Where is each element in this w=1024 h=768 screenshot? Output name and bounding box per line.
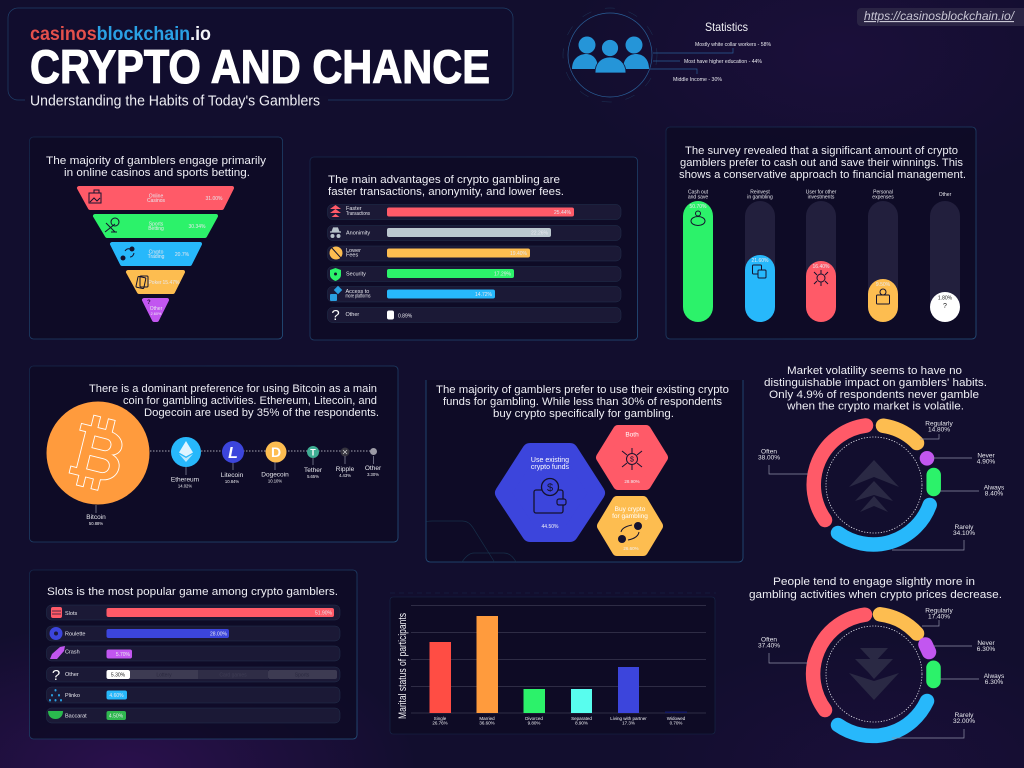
coin: ripple [336, 448, 355, 478]
bar: crash [46, 646, 340, 661]
axis labels: 17.3% [622, 720, 635, 726]
pill: used for other investments: User for other [806, 190, 837, 196]
funnel: crypto trading: 20.7% [175, 252, 190, 258]
funnel: other [144, 300, 167, 320]
axis labels: 9.80% [528, 720, 540, 726]
funnel: online casinos [79, 188, 232, 208]
pill: reinvest in gambling [745, 190, 775, 322]
icon: up arrows [849, 460, 899, 512]
winnings heading: The survey revealed that a significant amount of crypto [685, 145, 958, 157]
bar: baccarat [46, 708, 340, 723]
funnel: crypto trading: Crypto [149, 250, 164, 256]
y-axis title: Marital status of participants [397, 613, 409, 719]
winnings heading: shows a conservative approach to financial management. [679, 169, 966, 181]
coin: litecoin: 10.84% [225, 479, 239, 484]
panel: market volatility donut [758, 365, 1005, 550]
volatility labels: Rarely [955, 524, 974, 531]
price decrease labels: Rarely [955, 712, 974, 719]
price decrease heading [749, 576, 1002, 601]
main title: CRYPTO AND CHANCE [30, 40, 490, 93]
bar: plinko: 4.60% [109, 693, 124, 699]
axis labels: 8.90% [575, 720, 588, 726]
axis labels: Single [434, 716, 447, 721]
pill: cash out and save [683, 190, 713, 322]
volatility labels: 4.90% [977, 458, 995, 466]
panel: title [8, 8, 513, 110]
funding heading: The majority of gamblers prefer to use their existing crypto [436, 384, 729, 396]
bar: other: Other [346, 312, 359, 318]
pill: personal expenses: 9.50% [876, 282, 891, 288]
hexagon: use existing crypto funds: 44.50% [542, 524, 559, 530]
bar: other [328, 307, 621, 324]
bar: roulette [46, 626, 340, 641]
coin: dogecoin [261, 442, 289, 484]
funnel: online casinos: 31.00% [206, 196, 223, 202]
statistics list: Most have higher education - 44% [684, 59, 763, 65]
bar: access to more platforms: Access to [346, 289, 369, 295]
price decrease labels [758, 608, 1005, 725]
bar: faster transactions: Transactions [346, 211, 370, 217]
volatility labels: 14.80% [928, 426, 950, 434]
volatility labels: Never [977, 452, 996, 460]
hexagon: buy crypto for gambling: 26.60% [623, 546, 639, 551]
bar: other with sub-categories: Lottery [156, 672, 172, 678]
advantages heading: faster transactions, anonymity, and lower fees. [328, 186, 564, 198]
axis labels: Living with partner [610, 716, 647, 721]
funnel heading: in online casinos and sports betting. [64, 167, 250, 179]
volatility labels: Always [984, 484, 1005, 492]
price decrease labels: 6.30% [977, 646, 995, 653]
pill: personal expenses [868, 190, 898, 322]
statistics heading: Statistics [705, 20, 748, 34]
bar: faster transactions: Faster [346, 206, 362, 212]
bar: access to more platforms: more platforms [346, 294, 371, 300]
pill: used for other investments [806, 190, 837, 322]
bar: access to more platforms: 14.72% [475, 292, 493, 298]
bar: lower fees [328, 246, 621, 261]
coins heading: coin for gambling activities. Ethereum, Litecoin, and [123, 395, 377, 407]
subtitle: Understanding the Habits of Today's Gamblers [30, 92, 320, 110]
volatility heading [764, 365, 987, 412]
website url [857, 8, 1024, 26]
pill: used for other investments: 16.40% [813, 264, 830, 270]
bar: crash: 5.70% [116, 652, 131, 658]
icon: people in circle [563, 8, 657, 102]
coin: bitcoin [46, 402, 150, 526]
price decrease heading: People tend to engage slightly more in [773, 576, 975, 588]
pill: personal expenses: expenses [872, 194, 894, 200]
price decrease labels: 37.40% [758, 642, 780, 650]
bar: crash: Crash [65, 650, 80, 656]
funding heading: buy crypto specifically for gambling. [493, 408, 674, 420]
brand name: casinosblockchain.io [30, 24, 211, 45]
funnel: crypto trading [112, 244, 200, 264]
price decrease labels: Always [984, 673, 1005, 680]
bar: other: 0.89% [398, 314, 413, 320]
coin: ethereum: 14.02% [178, 484, 192, 488]
coin: other [365, 448, 382, 477]
slots heading: Slots is the most popular game among crypto gamblers. [47, 586, 338, 598]
pill: other: Other [939, 192, 952, 198]
panel: statistics [563, 8, 772, 102]
bar: roulette: Roulette [65, 632, 86, 638]
coins heading: Dogecoin are used by 35% of the respondents. [144, 407, 379, 419]
bar: other with sub-categories: Sports [295, 672, 310, 678]
coin: ripple: Ripple [336, 466, 355, 473]
coin: dogecoin: D [271, 444, 281, 460]
price decrease labels: Never [977, 640, 996, 647]
axis labels: 0.70% [670, 720, 682, 726]
funnel: poker: Poker [148, 280, 162, 286]
volatility labels: Often [761, 448, 777, 456]
statistics list [673, 42, 772, 83]
coins heading: There is a dominant preference for using Bitcoin as a main [89, 383, 377, 395]
hexagon: buy crypto for gambling: for gambling [612, 513, 648, 520]
funnel: sports betting [95, 216, 216, 236]
funnel: other: Other [150, 306, 163, 312]
hexagon: use existing crypto funds: crypto funds [531, 464, 570, 471]
coin: ripple: 4.43% [339, 473, 351, 478]
volatility heading: when the crypto market is volatile. [786, 400, 964, 412]
bar: slots: 51.90% [315, 610, 333, 616]
price decrease labels: 17.40% [928, 614, 950, 620]
donut chart: price decrease [813, 614, 934, 736]
panel: coins preference [30, 366, 398, 542]
funnel: sports betting: Betting [148, 226, 164, 232]
coin: litecoin: Litecoin [221, 472, 244, 479]
price decrease labels: Regularly [925, 608, 953, 614]
bar: baccarat: 4.50% [109, 714, 124, 720]
bar: roulette: 28.00% [210, 632, 228, 638]
bar: faster transactions: 25.44% [554, 210, 572, 216]
bar: other: ? [331, 307, 340, 324]
bar: slots: Slots [65, 611, 77, 617]
pill: other: 1.80% [938, 296, 953, 302]
bar: other with sub-categories [46, 667, 340, 684]
winnings heading: gamblers prefer to cash out and save their winnings. This [680, 157, 964, 169]
pill: used for other investments: investments [808, 194, 835, 200]
coin: ethereum: Ethereum [171, 476, 199, 484]
bars [430, 616, 687, 713]
panel: advantages bars [310, 157, 638, 340]
volatility labels: 34.10% [953, 530, 975, 537]
price decrease labels: 32.00% [953, 718, 975, 725]
volatility labels: 8.40% [985, 490, 1003, 498]
coin: dogecoin: 10.10% [268, 478, 282, 484]
funnel: crypto trading: Trading [148, 254, 165, 260]
bar: other with sub-categories: 5.30% [111, 672, 126, 678]
panel: price decrease donut [749, 576, 1005, 738]
price decrease heading: gambling activities when crypto prices decrease. [749, 589, 1002, 601]
hexagon: buy crypto for gambling: Buy crypto [615, 506, 646, 513]
pill: other [930, 192, 960, 322]
coin: ethereum [171, 437, 201, 488]
bar: lower fees: Lower [346, 248, 361, 254]
hexagon: both [601, 430, 663, 485]
volatility labels: Regularly [925, 420, 953, 428]
bar: other with sub-categories: Other [65, 672, 79, 678]
funnel heading [46, 155, 267, 179]
coins heading [89, 383, 379, 419]
coin: tether [304, 446, 323, 479]
advantages heading: The main advantages of crypto gambling are [328, 174, 560, 186]
bar: anonymity: Anonimity [346, 230, 370, 236]
volatility heading: distinguishable impact on gamblers' habits. [764, 377, 987, 389]
bar: access to more platforms [328, 286, 621, 302]
hexagon: use existing crypto funds: Use existing [531, 457, 569, 464]
coin: bitcoin: 50.88% [89, 521, 103, 526]
panel: funding hexagons [426, 380, 743, 562]
bar: baccarat: Baccarat [65, 714, 87, 720]
volatility labels: 38.00% [758, 454, 780, 462]
funding heading [436, 384, 729, 420]
donut chart: volatility [814, 426, 934, 544]
coin: dogecoin: Dogecoin [261, 472, 289, 478]
pill: reinvest in gambling: in gambling [747, 194, 773, 200]
axis labels: Widowed [667, 716, 686, 721]
funnel: poker [128, 272, 183, 292]
hexagon: use existing crypto funds: $ [547, 482, 553, 494]
funnel: poker: 15.47% [163, 280, 180, 286]
grid lines [411, 606, 706, 713]
volatility heading: Only 4.9% of respondents never gamble [769, 389, 979, 401]
coin: other: Other [365, 465, 382, 472]
hexagon: both: Both [625, 432, 639, 438]
bar: security: Security [346, 272, 366, 278]
pill: reinvest in gambling: 21.60% [752, 258, 769, 264]
bar: slots [46, 605, 340, 620]
coin: tether: 5.65% [307, 474, 319, 479]
hexagon: both: 28.90% [624, 479, 640, 484]
bar: anonymity [328, 226, 621, 240]
coin: litecoin: L [228, 445, 238, 462]
volatility labels [758, 420, 1005, 537]
coin: other: 3.30% [367, 472, 379, 477]
pill: cash out and save: Cash out [688, 190, 709, 196]
pill: other: ? [943, 303, 947, 310]
statistics list: Mostly white collar workers - 58% [695, 42, 772, 48]
funnel: online casinos: Online [149, 194, 163, 200]
axis labels: 36.60% [479, 720, 495, 726]
website url: https://casinosblockchain.io/ [864, 11, 1016, 23]
coin: tether: T [310, 448, 316, 458]
panel: winnings usage pills [666, 127, 976, 339]
price decrease labels: 6.30% [985, 679, 1003, 686]
price decrease labels: Often [761, 636, 777, 644]
bar: plinko [46, 687, 340, 703]
pill: reinvest in gambling: Reinvest [750, 190, 770, 196]
winnings heading [679, 145, 966, 181]
hexagon: both: $ [630, 456, 634, 464]
axis labels: Married [479, 716, 495, 721]
bar: lower fees: Fees [346, 252, 358, 258]
funnel: sports betting: Sports [149, 222, 164, 228]
funnel: other: ? [147, 300, 151, 306]
funnel heading: The majority of gamblers engage primarily [46, 155, 267, 167]
advantages heading [328, 174, 564, 198]
bar: security: 17.29% [494, 272, 512, 278]
axis labels: Divorced [525, 716, 543, 721]
bar: security [328, 266, 621, 282]
funding heading: funds for gambling. While less than 30% of respondents [443, 396, 723, 408]
funnel: other: 2.60% [151, 312, 162, 316]
coin: bitcoin: Bitcoin [86, 514, 106, 521]
pill: cash out and save: and save [688, 194, 708, 200]
icon: down arrows [849, 648, 899, 700]
hexagon: use existing crypto funds [503, 451, 597, 534]
funnel: online casinos: Casinos [147, 198, 166, 204]
coin: tether: Tether [304, 467, 323, 474]
bar: lower fees: 19.40% [510, 251, 528, 257]
panel: game types funnel [30, 137, 282, 339]
hexagon: buy crypto for gambling [602, 501, 658, 551]
panel: slots popularity bars [30, 570, 357, 739]
funnel: sports betting: 30.34% [189, 224, 206, 230]
axis labels [432, 716, 686, 726]
bar: anonymity: 22.26% [531, 230, 549, 236]
volatility heading: Market volatility seems to have no [787, 365, 962, 377]
bar: other with sub-categories: Card games [219, 672, 247, 678]
pill: personal expenses: Personal [873, 190, 893, 196]
pill: cash out and save: 50.70% [690, 204, 707, 210]
axis labels: Separated [571, 716, 592, 721]
statistics list: Middle Income - 30% [673, 77, 723, 83]
bar: plinko: Plinko [65, 693, 80, 699]
axis labels: 26.76% [432, 720, 448, 726]
bar: faster transactions [328, 204, 621, 220]
bar: other with sub-categories: ? [52, 667, 60, 684]
coin: litecoin [221, 441, 244, 484]
panel: marital status chart [390, 593, 716, 734]
